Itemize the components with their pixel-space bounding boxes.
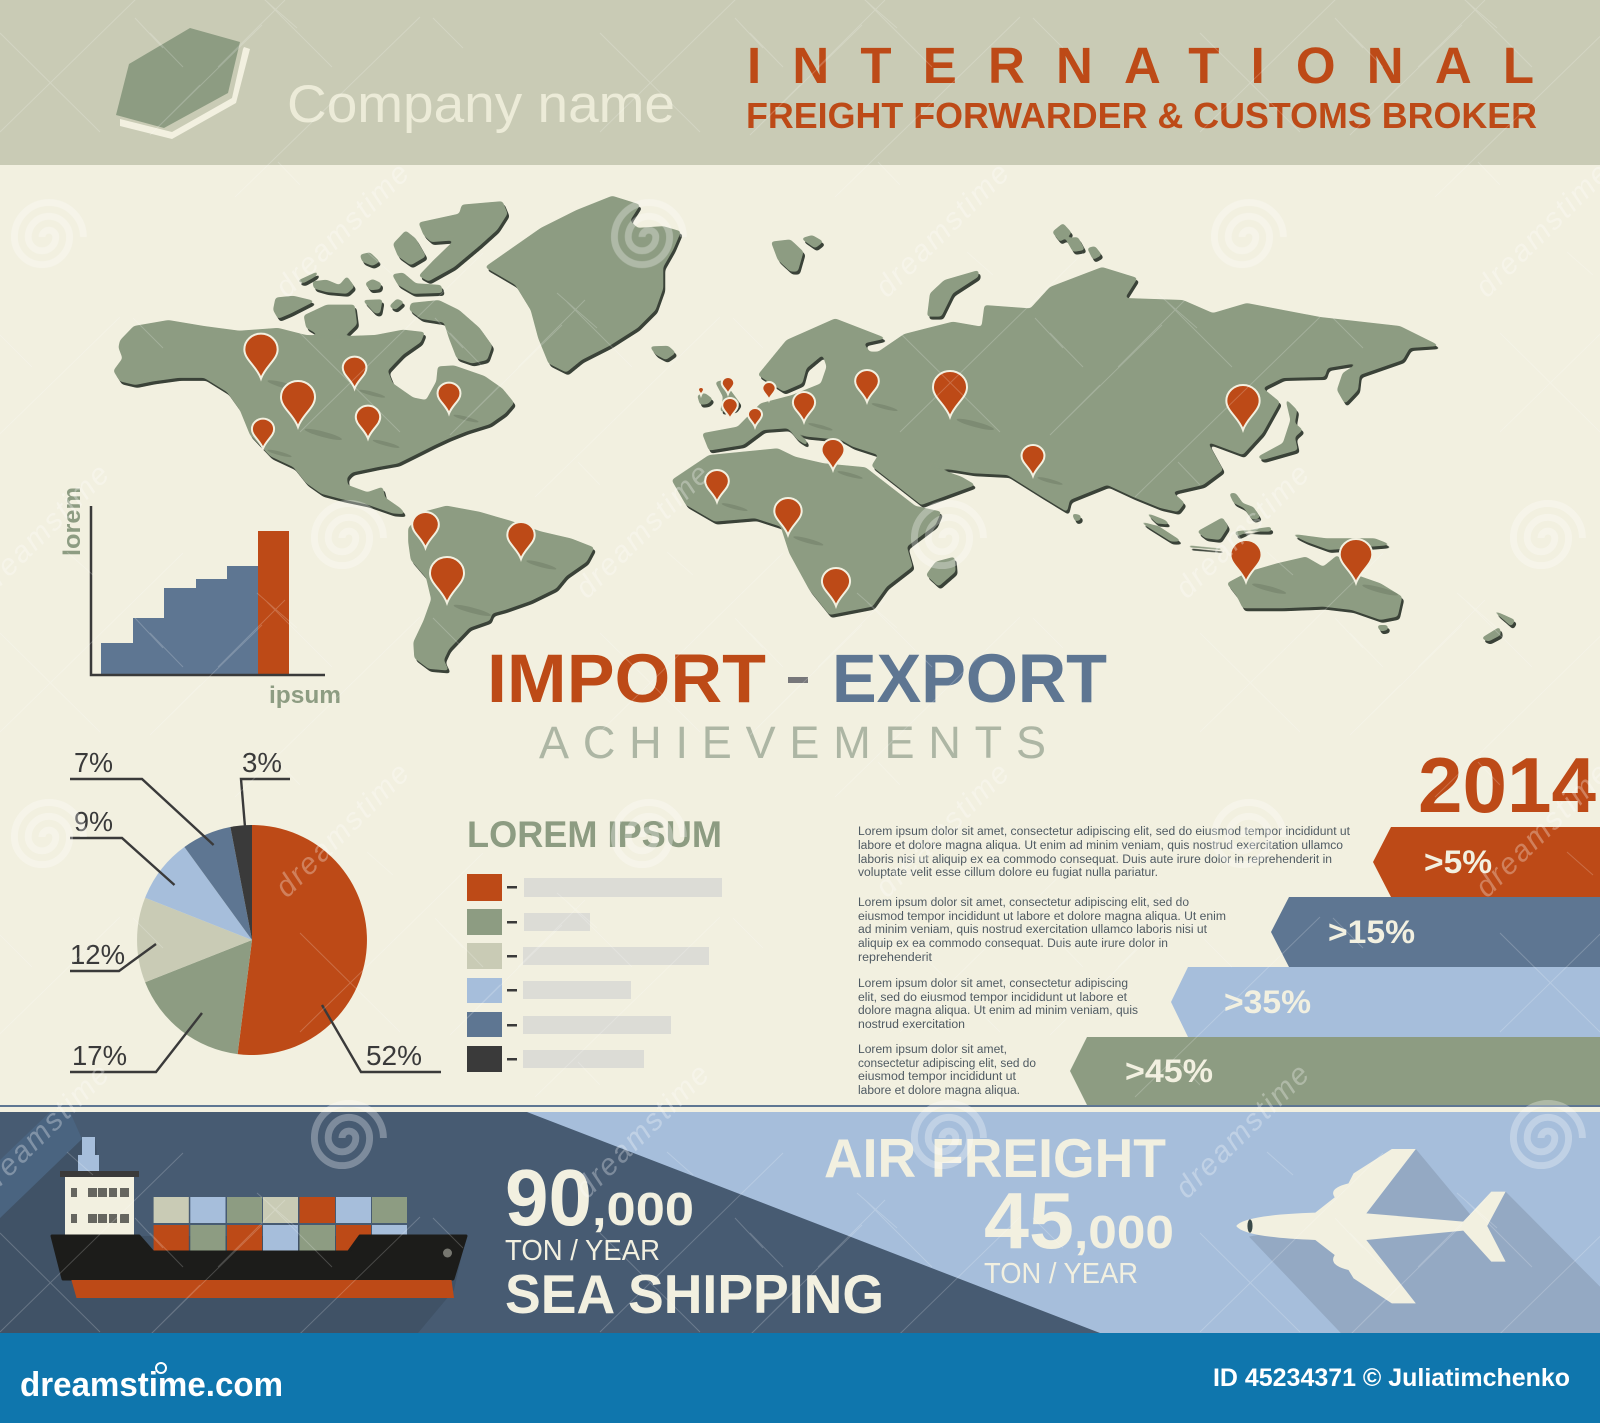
heading: import - export: EXPORT — [832, 640, 1107, 717]
text block 1: laboris nisi ut aliquip ex ea commodo consequat. Duis aute irure dolor in reprehenderit in — [858, 854, 1332, 866]
arrow band: 5%: >5% — [1424, 844, 1492, 880]
stat: 90,000 — [505, 1153, 694, 1242]
arrow band: 15% — [1271, 897, 1600, 967]
arrow band: 5% — [1373, 827, 1600, 897]
pie chart — [70, 747, 441, 1072]
lighter strip beside the shadow — [0, 1112, 82, 1218]
pie labels — [70, 747, 422, 1071]
watermark: dreamstime — [269, 757, 416, 904]
year 2014: 2014 — [1418, 741, 1596, 829]
text block 2: eiusmod tempor incididunt ut labore et dolore magna aliqua. Ut enim — [858, 911, 1226, 923]
header band — [0, 0, 1600, 165]
company name: Company name — [287, 75, 675, 134]
text block 3: Lorem ipsum dolor sit amet, consectetur adipiscing — [858, 978, 1128, 990]
arrow band: 15%: >15% — [1328, 914, 1415, 950]
pie labels: 52% — [366, 1040, 422, 1071]
watermark — [0, 157, 1600, 1205]
pie labels: 17% — [72, 1040, 127, 1071]
text block 1: voluptate velit esse cillum dolore eu fugiat nulla pariatur. — [858, 867, 1158, 879]
text block 3: elit, sed do eiusmod tempor incididunt ut labore et — [858, 992, 1128, 1004]
text block 4: consectetur adipiscing elit, sed do — [858, 1058, 1036, 1070]
watermark: dreamstime — [569, 1058, 716, 1205]
legend heading: LOREM IPSUM — [467, 814, 722, 855]
map: British Isles and Arctic islands — [697, 223, 1102, 412]
heading: air freight: AIR FREIGHT — [824, 1127, 1166, 1189]
arrow band: 35%: >35% — [1224, 984, 1311, 1020]
watermark: dreamstime — [569, 458, 716, 605]
logo hexagon — [116, 28, 250, 139]
bar chart — [59, 487, 341, 709]
stat: 45,000: 45 — [984, 1176, 1074, 1265]
footer bar — [0, 1333, 1600, 1423]
legend — [467, 874, 722, 1072]
plane long shadow — [1249, 1149, 1600, 1333]
label: ton per year sea: TON / YEAR — [505, 1235, 660, 1267]
pie leader lines — [70, 779, 441, 1072]
axis label: ipsum: ipsum — [269, 682, 341, 709]
text block 2: Lorem ipsum dolor sit amet, consectetur adipiscing elit, sed do — [858, 897, 1189, 909]
panel: sea shipping background — [0, 1112, 1100, 1333]
pie labels: 3% — [242, 747, 282, 778]
text block 3 — [858, 978, 1138, 1031]
text block 4 — [858, 1044, 1036, 1097]
watermark: dreamstime — [1169, 458, 1316, 605]
arrow band: 45%: >45% — [1125, 1053, 1213, 1089]
subtitle: freight forwarder: FREIGHT FORWARDER & CUSTOMS BROKER — [746, 95, 1537, 136]
axis label: lorem: lorem — [59, 487, 86, 556]
title: international: INTERNATIONAL — [747, 37, 1534, 94]
watermark: dreamstime — [869, 157, 1016, 304]
text block 1: labore et dolore magna aliqua. Ut enim ad minim veniam, quis nostrud exercitation ullamco — [858, 840, 1343, 852]
text block 4: Lorem ipsum dolor sit amet, — [858, 1044, 1007, 1056]
icon: airplane — [1236, 1149, 1506, 1303]
arrow band: 35% — [1171, 967, 1600, 1037]
text block 3: nostrud exercitation — [858, 1019, 965, 1031]
map: Americas and Arctic islands — [113, 196, 681, 671]
text block 1: Lorem ipsum dolor sit amet, consectetur adipiscing elit, sed do eiusmod tempor incididunt ut — [858, 826, 1351, 838]
stat: 45,000: ,000 — [1074, 1206, 1174, 1258]
heading: sea shipping: SEA SHIPPING — [505, 1263, 884, 1325]
map pins: Americas — [244, 334, 557, 618]
label: ton per year air: TON / YEAR — [984, 1258, 1138, 1290]
stat: 90,000: ,000 — [592, 1183, 694, 1235]
world map — [113, 196, 1515, 671]
text block 4: eiusmod tempor incididunt ut — [858, 1071, 1017, 1083]
map pins: Europe, Asia, Africa, Australia — [698, 370, 1399, 606]
ship long shadow — [0, 1137, 466, 1333]
icon: container ship — [52, 1137, 466, 1298]
plane shadow and plane — [1236, 1149, 1600, 1333]
pie labels: 7% — [74, 747, 113, 778]
text block 4: labore et dolore magna aliqua. — [858, 1085, 1020, 1097]
pie labels: 9% — [74, 806, 113, 837]
footer logo: dreamstime.com — [20, 1366, 283, 1404]
stat: 90,000: 90 — [505, 1153, 592, 1242]
heading: import - export — [487, 640, 1107, 717]
stat: 45,000 — [984, 1176, 1174, 1265]
footer credit: ID 45234371 © Juliatimchenko — [1213, 1364, 1570, 1392]
map: Eurasia, Africa and Oceania — [672, 235, 1515, 642]
text block 2: ad minim veniam, quis nostrud exercitation ullamco laboris nisi ut — [858, 924, 1208, 936]
arrow band: 45% — [1070, 1037, 1600, 1105]
footer spiral — [156, 1363, 166, 1373]
text block 2: aliquip ex ea commodo consequat. Duis aute irure dolor in — [858, 938, 1168, 950]
text block 2: reprehenderit — [858, 952, 933, 964]
text block 2 — [858, 897, 1226, 964]
watermark: dreamstime — [869, 757, 1016, 904]
subheading: achievements: ACHIEVEMENTS — [539, 717, 1046, 768]
transport band — [0, 1105, 1600, 1333]
watermark: dreamstime — [269, 157, 416, 304]
watermark: dreamstime — [1169, 1058, 1316, 1205]
heading: import - export: IMPORT — [487, 640, 766, 717]
pie labels: 12% — [70, 939, 125, 970]
text block 1 — [858, 826, 1351, 879]
text block 3: dolore magna aliqua. Ut enim ad minim veniam, quis — [858, 1005, 1138, 1017]
